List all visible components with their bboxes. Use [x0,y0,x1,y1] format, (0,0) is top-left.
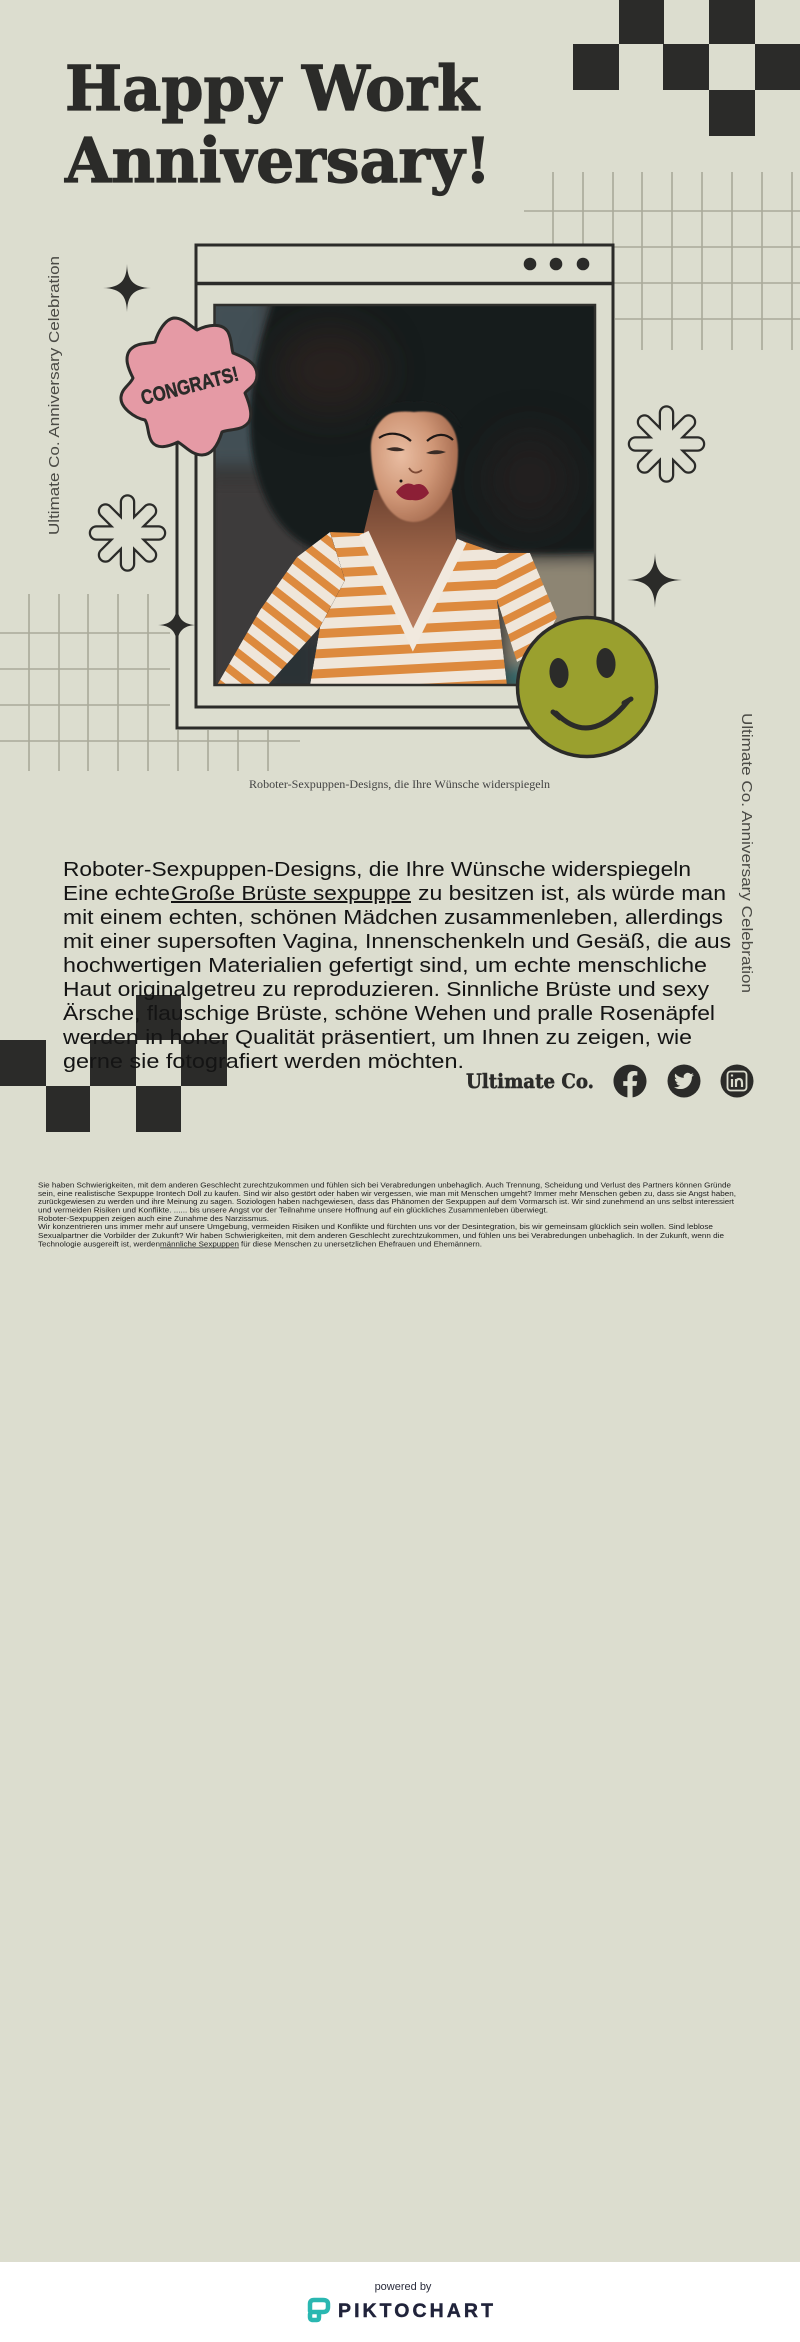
icon: twitter [668,1064,700,1098]
small print paragraph: Sie haben Schwierigkeiten, mit dem anderen Geschlecht zurechtzukommen und fühlen sich bei Verabredungen unbehaglich. Auch Trennung, Scheidung und Verlust des Partners können Gründe [38,1180,731,1190]
small print paragraph: männliche Sexpuppen [160,1240,239,1248]
small print paragraph: Sexualpartner die Vorbilder der Zukunft? Wir haben Schwierigkeiten, mit dem anderen Geschlecht zurechtzukommen, und fühlen uns bei Verabredungen unbehaglich. In der Zukunft, wenn die [38,1231,724,1240]
main body text: mit einer supersoften Vagina, Innenschenkeln und Gesäß, die aus [63,931,731,953]
lips [396,484,429,500]
icon: facebook [614,1065,646,1097]
flower outline left [96,502,158,564]
sparkle top left [103,264,151,312]
checker pattern top right [573,0,800,136]
window frame [196,245,613,707]
company name: Ultimate Co. [466,1069,594,1093]
hair [250,300,600,553]
flower outline right [636,413,698,475]
small print paragraph: Roboter-Sexpuppen zeigen auch eine Zunahme des Narzissmus. [38,1214,269,1223]
eyes [386,447,446,454]
small print paragraph: zurückgewiesen zu werden und ihre Meinung zu sagen. Soziologen haben nachgewiesen, dass das Phänomen der Sexpuppen auf dem Vormarsch ist. Wir sind zunehmend an uns selbst interessiert [38,1197,734,1206]
photo border [214,305,595,685]
small print paragraph: und vermeiden Risiken und Konflikte. ...... bis unsere Angst vor der Teilnahme unsere Hoffnung auf ein glückliches Zusammenleben überwiegt. [38,1206,548,1214]
vertical label left: Ultimate Co. Anniversary Celebration [47,256,63,535]
vertical label right: Ultimate Co. Anniversary Celebration [738,713,754,993]
back frame [177,430,540,728]
smiley face [518,618,656,756]
main body text: Roboter-Sexpuppen-Designs, die Ihre Wünsche widerspiegeln [63,859,691,881]
piktochart logo icon [310,2300,328,2320]
nose and piercing [409,468,422,473]
main body text: hochwertigen Materialien gefertigt sind, um echte menschliche [63,955,707,977]
main body text [62,859,731,1073]
powered by label: powered by [375,2281,432,2293]
checker pattern bottom left [0,995,227,1132]
main body text: Große Brüste sexpuppe [171,883,411,905]
icon: linkedin [720,1064,754,1098]
title: Happy Work [65,52,481,125]
shirt collar [364,533,462,640]
eyebrows [379,434,453,441]
footer bar [0,2262,800,2342]
hair curls over forehead [387,406,444,416]
shirt left arm [217,532,345,685]
face [371,407,458,522]
shirt torso [310,532,507,685]
title: Anniversary! [64,124,491,197]
small print paragraph: für diese Menschen zu unersetzlichen Ehefrauen und Ehemännern. [241,1240,482,1248]
small print paragraph: Technologie ausgereift ist, werden [38,1240,160,1248]
grid left [0,594,300,771]
photo caption: Roboter-Sexpuppen-Designs, die Ihre Wünsche widerspiegeln [249,779,550,791]
small print paragraph: sein, eine realistische Sexpuppe Irontech Doll zu kaufen. Sind wir also gestört oder haben wir vergessen, wie man mit Menschen umgeht? Immer mehr Menschen geben zu, dass sie Angst haben, [38,1189,736,1198]
congrats badge: CONGRATS! [138,363,241,410]
neck and chest [364,490,456,628]
main body text: zu besitzen ist, als würde man [418,883,726,905]
main body text: werden in hoher Qualität präsentiert, um Ihnen zu zeigen, wie [62,1027,692,1049]
sparkle on frame [158,605,196,645]
grid top right [524,172,800,350]
hair brown tint [280,328,556,510]
small print paragraph: Wir konzentrieren uns immer mehr auf unsere Umgebung, vermeiden Risiken und Konflikte und fürchten uns vor der Desintegration, bis wir gemeinsam glücklich sein wollen. Sind leblose [38,1222,713,1231]
piktochart wordmark: PIKTOCHART [338,2300,493,2322]
main body text: Ärsche, flauschige Brüste, schöne Wehen und pralle Rosenäpfel [63,1003,715,1025]
photo: portrait of a woman with curly hair and striped top [216,306,594,684]
main body text: Haut originalgetreu zu reproduzieren. Sinnliche Brüste und sexy [63,979,709,1001]
main body text: Eine echte [63,883,170,905]
main body text: gerne sie fotografiert werden möchten. [63,1051,464,1073]
congrats badge [121,318,257,455]
main body text: mit einem echten, schönen Mädchen zusammenleben, allerdings [63,907,723,929]
small print paragraph [38,1180,736,1248]
sparkle right [627,553,682,608]
shirt right arm [497,553,557,662]
title [64,52,491,197]
